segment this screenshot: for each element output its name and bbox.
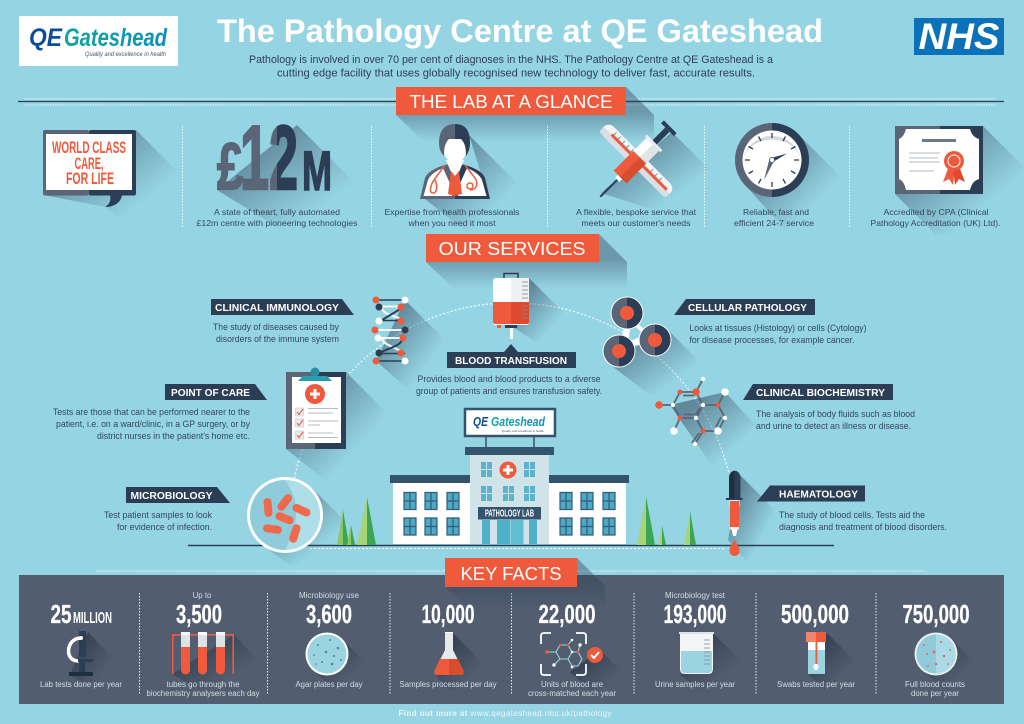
fact: 750,000: 750,000 <box>902 599 970 629</box>
fact: 22,000 <box>528 599 625 698</box>
icon: 12m figure <box>217 108 370 235</box>
icon: speech billboard: FOR LIFE <box>66 170 114 188</box>
heading: our services: OUR SERVICES <box>438 238 586 259</box>
fact: 22,000: Units of blood are <box>541 680 604 689</box>
hospital building <box>390 409 629 544</box>
label <box>743 384 893 400</box>
logo: QE Gateshead: QE <box>29 24 63 52</box>
heading: key facts: KEY FACTS <box>460 563 562 584</box>
fact: 3,500: Up to <box>193 591 212 600</box>
description: Tests are those that can be performed nearer to the <box>53 407 250 417</box>
fact: 500,000 <box>777 599 860 690</box>
heading: key facts <box>445 558 577 587</box>
pathology lab sign <box>478 507 541 520</box>
icon: speech billboard: WORLD CLASS <box>52 139 126 157</box>
description: The study of blood cells. Tests aid the <box>779 510 925 520</box>
panel: clinical immunology <box>211 296 445 395</box>
footer link: Find out more at www.qegateshead.nhs.uk/pathology <box>398 709 612 718</box>
icon: test tubes in rack <box>172 632 262 690</box>
fact: 25 million: Lab tests done per year <box>40 680 122 689</box>
caption: Pathology Accreditation (UK) Ltd). <box>870 218 1000 228</box>
description: group of patients and ensures transfusion safety. <box>416 386 602 396</box>
label: POINT OF CARE <box>171 388 250 399</box>
fact: 500,000: Swabs tested per year <box>777 680 855 689</box>
fact: 500,000: 500,000 <box>781 599 849 629</box>
panel: reliable <box>734 123 840 235</box>
label <box>447 344 576 368</box>
icon: blood count plate <box>914 632 978 690</box>
intro text <box>249 54 773 80</box>
panel: blood transfusion <box>416 274 602 396</box>
doors <box>482 520 537 544</box>
icon: dropper <box>726 471 775 565</box>
label <box>674 299 815 315</box>
pathology lab sign: PATHOLOGY LAB <box>485 508 534 520</box>
caption: Accredited by CPA (Clinical <box>884 207 989 217</box>
panel: clinical biochemistry <box>655 377 915 470</box>
label: HAEMATOLOGY <box>779 490 858 500</box>
panel: accredited <box>870 126 1024 235</box>
dividers <box>140 593 876 695</box>
fact: 3,500: tubes go through the <box>166 680 240 689</box>
intro text: cutting edge facility that uses globally recognised new technology to deliver fast, accurate results. <box>277 68 755 80</box>
fact: 3,600: Microbiology use <box>299 591 360 600</box>
label: MICROBIOLOGY <box>130 491 213 502</box>
icon: certificate <box>895 126 1024 235</box>
icon: swab tube <box>806 632 860 690</box>
description: and urine to detect an illness or disease. <box>756 421 911 431</box>
icon: flask <box>434 632 490 690</box>
fact: 25 million: MILLION <box>73 610 112 627</box>
caption <box>384 207 520 228</box>
caption: £12m centre with pioneering technologies <box>196 218 358 228</box>
fact: 750,000 <box>902 599 978 698</box>
description <box>104 510 212 532</box>
description: Looks at tissues (Histology) or cells (Cytology) <box>690 323 866 333</box>
icon: 12m figure: £ <box>217 129 243 203</box>
shadow: services banner <box>426 234 627 289</box>
panel: 12m centre <box>196 108 370 235</box>
icon: molecule scan with tick <box>541 633 625 695</box>
fact: 3,500 <box>146 591 262 698</box>
description <box>756 409 915 431</box>
fact: 193,000: Microbiology test <box>665 591 726 600</box>
panel: world class care <box>43 130 176 235</box>
column dividers <box>182 126 850 228</box>
description: diagnosis and treatment of blood disorders. <box>779 522 947 532</box>
fact: 3,600 <box>296 591 368 690</box>
icon: clipboard <box>286 368 385 480</box>
description: The analysis of body fluids such as blood <box>756 409 915 419</box>
caption: A state of theart, fully automated <box>214 207 340 217</box>
caption: A flexible, bespoke service that <box>576 207 697 217</box>
icon: dna <box>372 296 445 395</box>
description: The study of diseases caused by <box>213 322 339 332</box>
heading: our services <box>426 234 599 262</box>
shadow: key facts banner <box>445 558 605 612</box>
label <box>165 384 267 400</box>
description <box>690 323 866 345</box>
caption <box>870 207 1000 228</box>
panel: point of care <box>53 368 385 480</box>
icon: cells <box>602 296 705 400</box>
label: BLOOD TRANSFUSION <box>455 356 567 367</box>
icon: clock <box>735 123 840 235</box>
description <box>779 510 947 532</box>
fact: 193,000: Urine samples per year <box>655 680 735 689</box>
label: CLINICAL IMMUNOLOGY <box>215 303 339 314</box>
description: district nurses in the patient's home etc. <box>97 431 250 441</box>
description <box>416 374 602 396</box>
panel: cellular pathology <box>602 296 866 400</box>
fact: 10,000 <box>400 599 497 690</box>
panel: key facts <box>19 558 1004 704</box>
description: Provides blood and blood products to a diverse <box>418 374 600 384</box>
fact: 22,000: 22,000 <box>538 599 596 629</box>
fact: 3,500: 3,500 <box>176 599 222 629</box>
icon: microscope <box>69 631 115 690</box>
fact: 3,600: 3,600 <box>306 599 352 629</box>
fact: 25 million <box>40 599 122 690</box>
caption <box>734 207 814 228</box>
dotted rule above key facts <box>96 570 925 572</box>
logo: NHS: NHS <box>918 16 1000 57</box>
fact: 193,000 <box>655 591 745 690</box>
caption: meets our customer's needs <box>582 218 690 228</box>
icon: 12m figure: 12 <box>240 108 298 209</box>
fact: 750,000: Full blood counts <box>905 680 965 689</box>
fact: 3,500: biochemistry analysers each day <box>146 689 260 698</box>
section rule <box>18 99 1004 105</box>
fact: 22,000: cross-matched each year <box>528 689 616 698</box>
icon: molecule <box>655 377 760 470</box>
label: CLINICAL BIOCHEMISTRY <box>756 388 885 399</box>
fact: 3,600: Agar plates per day <box>296 680 363 689</box>
label <box>211 299 354 315</box>
shadow: lab banner <box>396 87 654 142</box>
description <box>213 322 339 344</box>
logo: QE Gateshead: Quality and excellence in health <box>85 52 167 58</box>
heading: the lab at a glance: THE LAB AT A GLANCE <box>410 91 612 112</box>
caption: efficient 24-7 service <box>734 218 814 228</box>
title: The Pathology Centre at QE Gateshead <box>217 13 823 49</box>
label <box>757 486 865 502</box>
caption <box>196 207 358 228</box>
caption: Expertise from health professionals <box>384 207 520 217</box>
icon: 12m figure: M <box>302 139 332 202</box>
central windows <box>481 462 535 501</box>
caption <box>576 207 697 228</box>
description: Test patient samples to look <box>104 510 212 520</box>
icon: syringe and thermometer <box>592 119 715 215</box>
description: for disease processes, for example cancer. <box>690 335 854 345</box>
caption: Reliable, fast and <box>743 207 809 217</box>
trees left <box>337 497 376 545</box>
panel: expertise <box>384 124 525 235</box>
label: CELLULAR PATHOLOGY <box>688 303 807 314</box>
description: for evidence of infection. <box>117 522 212 532</box>
logo: QE Gateshead: Gateshead <box>64 24 168 52</box>
panel: flexible service <box>576 119 715 228</box>
dotted arc <box>292 303 729 490</box>
trees right <box>637 496 696 545</box>
icon: petri dish with bacteria <box>247 477 352 565</box>
icon: speech billboard: CARE, <box>74 155 104 173</box>
description <box>53 407 250 441</box>
side windows <box>404 492 615 535</box>
building sign <box>465 409 555 436</box>
fact: 193,000: 193,000 <box>664 599 726 629</box>
description: disorders of the immune system <box>216 334 339 344</box>
fact: 750,000: done per year <box>911 689 959 698</box>
icon: speech billboard <box>43 130 176 235</box>
icon: blood bag <box>493 274 570 345</box>
heading: the lab at a glance <box>396 87 626 115</box>
caption: when you need it most <box>407 218 496 228</box>
cross sign <box>500 462 516 478</box>
fact: 25 million: 25 <box>50 599 72 629</box>
building sign: QE <box>473 414 488 429</box>
ground line <box>188 546 834 548</box>
icon: doctor <box>420 124 525 235</box>
intro text: Pathology is involved in over 70 per cent of diagnoses in the NHS. The Pathology Centre at QE Gateshead is a <box>249 54 773 66</box>
building sign: Quality and excellence in health <box>502 429 544 433</box>
logo: QE Gateshead <box>19 16 178 66</box>
panel: haematology <box>726 471 947 565</box>
icon: agar plate <box>306 632 368 690</box>
panel: microbiology <box>104 477 352 565</box>
fact: 10,000: Samples processed per day <box>400 680 497 689</box>
icon: beaker <box>679 632 745 690</box>
building sign: Gateshead <box>491 414 546 429</box>
fact: 10,000: 10,000 <box>422 599 474 629</box>
description: patient, i.e. on a ward/clinic, in a GP surgery, or by <box>56 419 250 429</box>
label <box>126 487 230 503</box>
